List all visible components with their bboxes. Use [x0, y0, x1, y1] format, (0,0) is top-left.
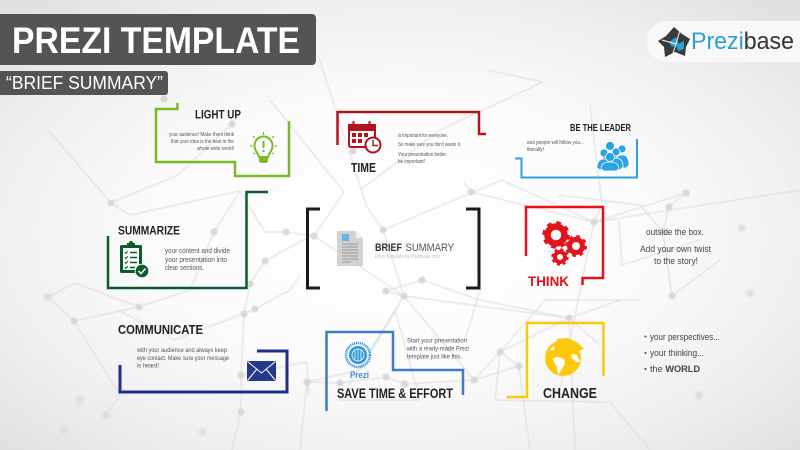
icon: envelope [247, 361, 276, 381]
text block: your perspectives... [650, 332, 720, 343]
text block: your presentation into [165, 257, 227, 264]
text block [644, 332, 720, 375]
frame [326, 332, 463, 411]
text block: outside the box. [646, 227, 704, 238]
frame [526, 207, 603, 285]
panel: brief summary center [308, 209, 479, 288]
text block: Add your own twist [640, 244, 711, 255]
text block: template just like this. [407, 354, 462, 360]
panel: be the leader [515, 123, 637, 178]
text block: literally! [527, 147, 544, 153]
frame [156, 103, 289, 176]
heading: SUMMARIZE [118, 226, 180, 238]
heading: TIME [351, 161, 376, 175]
panel: think [526, 207, 711, 289]
frame [515, 139, 637, 178]
panel: save time and effort [326, 332, 469, 411]
heading: BE THE LEADER [570, 123, 632, 134]
text block [136, 347, 229, 370]
icon: document [337, 231, 363, 266]
icon: team of people [597, 142, 629, 171]
text block: with a ready-made Prezi [406, 346, 469, 352]
text block: your audience! Make them think [169, 132, 234, 138]
logo: Prezibase [646, 21, 800, 62]
caption: Prezi Template by Prezibase.com [375, 254, 440, 260]
text block: that your idea is the best in the [171, 139, 234, 145]
text block: is heard! [137, 362, 159, 370]
icon: Prezibase star [658, 27, 690, 57]
panel: summarize [108, 192, 268, 288]
icon: Prezi logo [346, 343, 370, 367]
text block: be important! [398, 159, 425, 165]
frame [507, 323, 604, 397]
text block: eye contact. Make sure your message [137, 355, 229, 362]
subtitle banner: “BRIEF SUMMARY” [6, 73, 163, 93]
text block: your content and divide [165, 248, 230, 255]
heading: THINK [528, 273, 569, 289]
text block: the WORLD [650, 364, 700, 375]
panel: time [338, 112, 486, 175]
text block: is important for everyone. [398, 133, 448, 139]
heading continuation: SUMMARY [406, 242, 455, 254]
icon: clipboard with check [120, 241, 149, 278]
text block: with your audience and always keep [136, 347, 227, 354]
frame [338, 112, 486, 145]
wordmark: Prezibase [691, 28, 794, 55]
text block [406, 338, 469, 360]
right bracket [466, 209, 479, 288]
text block [169, 132, 234, 152]
panel: communicate [118, 322, 287, 392]
text block [398, 133, 461, 165]
logo label: Prezi [350, 370, 369, 380]
text block: Start your presentation [407, 338, 467, 344]
text block: to the story! [654, 256, 698, 267]
text block: and people will follow you... [527, 140, 584, 146]
frame [120, 351, 287, 392]
text block: clear sections. [165, 265, 204, 272]
text block [640, 227, 711, 267]
text block: your thinking... [650, 348, 704, 359]
heading: SAVE TIME & EFFORT [337, 385, 453, 401]
heading: COMMUNICATE [118, 322, 203, 337]
text block: whole wide world! [196, 146, 234, 152]
frame [108, 192, 268, 288]
text block [165, 248, 230, 272]
heading: LIGHT UP [195, 108, 241, 122]
icon: gears [544, 223, 586, 264]
icon: calendar and clock [348, 121, 380, 152]
panel: light up [156, 103, 289, 176]
text block [527, 140, 584, 153]
text block: So make sure you don't waste it. [398, 142, 461, 148]
heading: BRIEF [375, 242, 402, 254]
title banner: PREZI TEMPLATE [12, 20, 300, 61]
heading: CHANGE [543, 386, 597, 402]
text block: Your presentation better [398, 152, 446, 158]
left bracket [308, 209, 320, 288]
icon: globe [545, 338, 584, 376]
icon: light bulb [250, 132, 277, 163]
panel: change [507, 323, 720, 402]
